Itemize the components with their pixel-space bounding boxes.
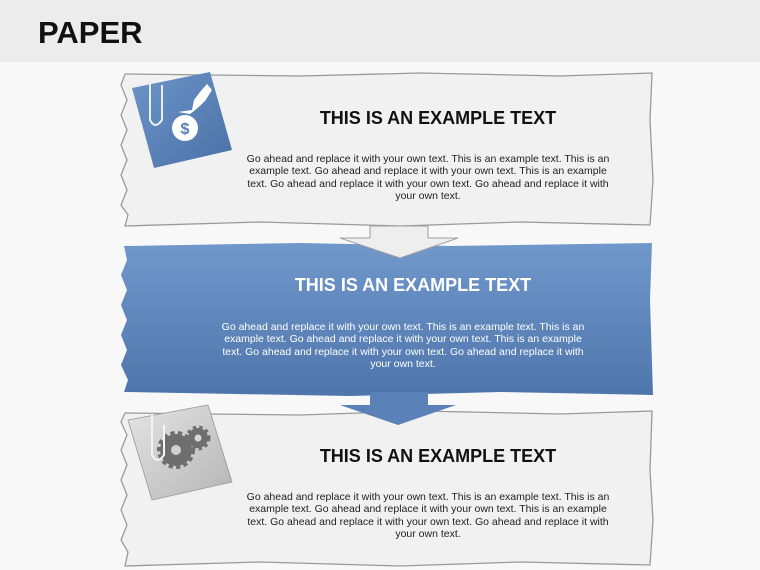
text block 1: Go ahead and replace it with your own text. This is an example text. This is an bbox=[247, 153, 609, 165]
heading 1: THIS IS AN EXAMPLE TEXT bbox=[320, 108, 556, 128]
text block 3: your own text. bbox=[395, 528, 461, 540]
text block 2: your own text. bbox=[370, 358, 436, 370]
text block 1: your own text. bbox=[395, 190, 461, 202]
text block 3: example text. Go ahead and replace it with your own text. This is an example bbox=[249, 503, 607, 515]
icon: money hand bbox=[132, 72, 232, 168]
text block 2: text. Go ahead and replace it with your own text. Go ahead and replace it with bbox=[222, 346, 584, 358]
panel: bottom paper bbox=[121, 411, 653, 566]
text block 3: text. Go ahead and replace it with your own text. Go ahead and replace it with bbox=[247, 516, 609, 528]
panel: middle blue paper bbox=[121, 243, 653, 396]
text block 1: text. Go ahead and replace it with your own text. Go ahead and replace it with bbox=[247, 178, 609, 190]
header band bbox=[0, 0, 760, 62]
arrow 1 bbox=[340, 226, 458, 258]
arrow 2 bbox=[340, 392, 456, 425]
text block 3: Go ahead and replace it with your own text. This is an example text. This is an bbox=[247, 491, 609, 503]
title: PAPER bbox=[38, 15, 143, 50]
text block 2: example text. Go ahead and replace it with your own text. This is an example bbox=[224, 333, 582, 345]
heading 3: THIS IS AN EXAMPLE TEXT bbox=[320, 446, 556, 466]
panel: top paper bbox=[121, 73, 653, 226]
icon: money hand: $ bbox=[181, 121, 190, 138]
text block 2: Go ahead and replace it with your own text. This is an example text. This is an bbox=[222, 321, 584, 333]
heading 2: THIS IS AN EXAMPLE TEXT bbox=[295, 275, 531, 295]
text block 1: example text. Go ahead and replace it with your own text. This is an example bbox=[249, 165, 607, 177]
icon: gears bbox=[128, 405, 232, 500]
